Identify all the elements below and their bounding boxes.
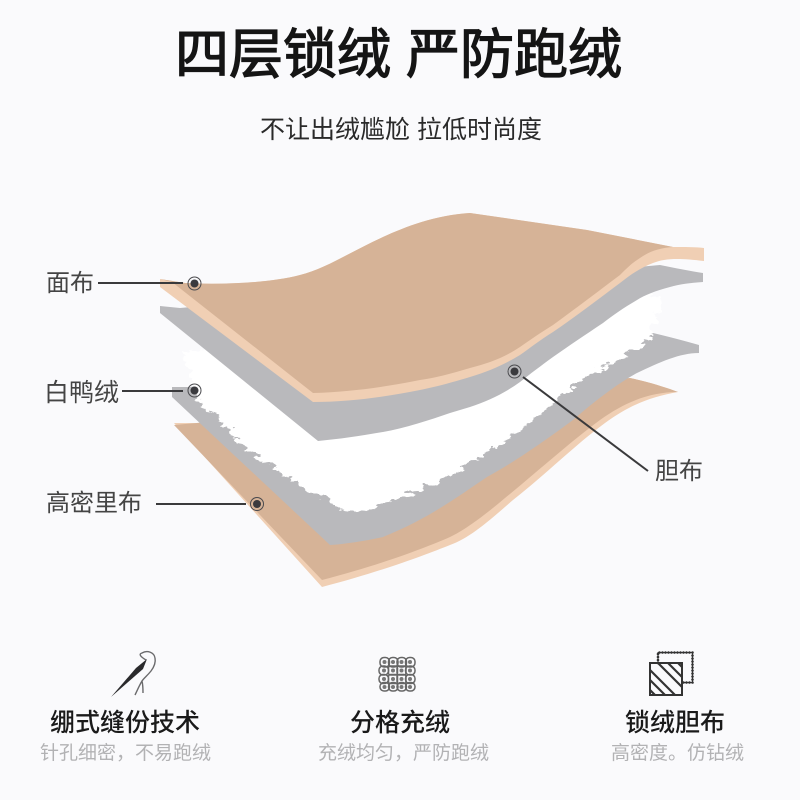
callout: inner shell marker [508,365,648,471]
title: 四层锁绒 严防跑绒 [175,25,622,85]
icon: fabric swatches [650,652,692,695]
feature description: 充绒均匀，严防跑绒 [318,743,489,764]
layer: white duck down [183,296,660,512]
callout: face fabric marker [98,277,201,290]
icon: needle and thread [111,652,155,697]
layer: grey shell back [160,265,703,441]
layer: grey down-proof back [172,333,699,545]
callout: duck down marker [122,384,201,397]
feature: compartments [318,709,489,764]
subtitle: 不让出绒尴尬 拉低时尚度 [260,116,542,144]
feature heading: 绷式缝份技术 [50,709,200,737]
feature description: 针孔细密，不易跑绒 [40,743,211,764]
feature: down-proof shell [611,709,744,764]
callout: lining marker [156,498,264,510]
icon: quilted grid [379,658,415,691]
feature description: 高密度。仿钻绒 [611,743,744,764]
label: face fabric: 面布 [46,270,94,297]
feature heading: 分格充绒 [350,709,450,737]
label: white duck down: 白鸭绒 [44,379,119,407]
layer: outer fabric [160,213,704,402]
feature: stitching [40,709,211,764]
layer: lining fabric [174,378,678,587]
label: inner shell: 胆布 [655,458,703,485]
label: high density lining: 高密里布 [46,490,142,517]
feature heading: 锁绒胆布 [625,709,725,737]
